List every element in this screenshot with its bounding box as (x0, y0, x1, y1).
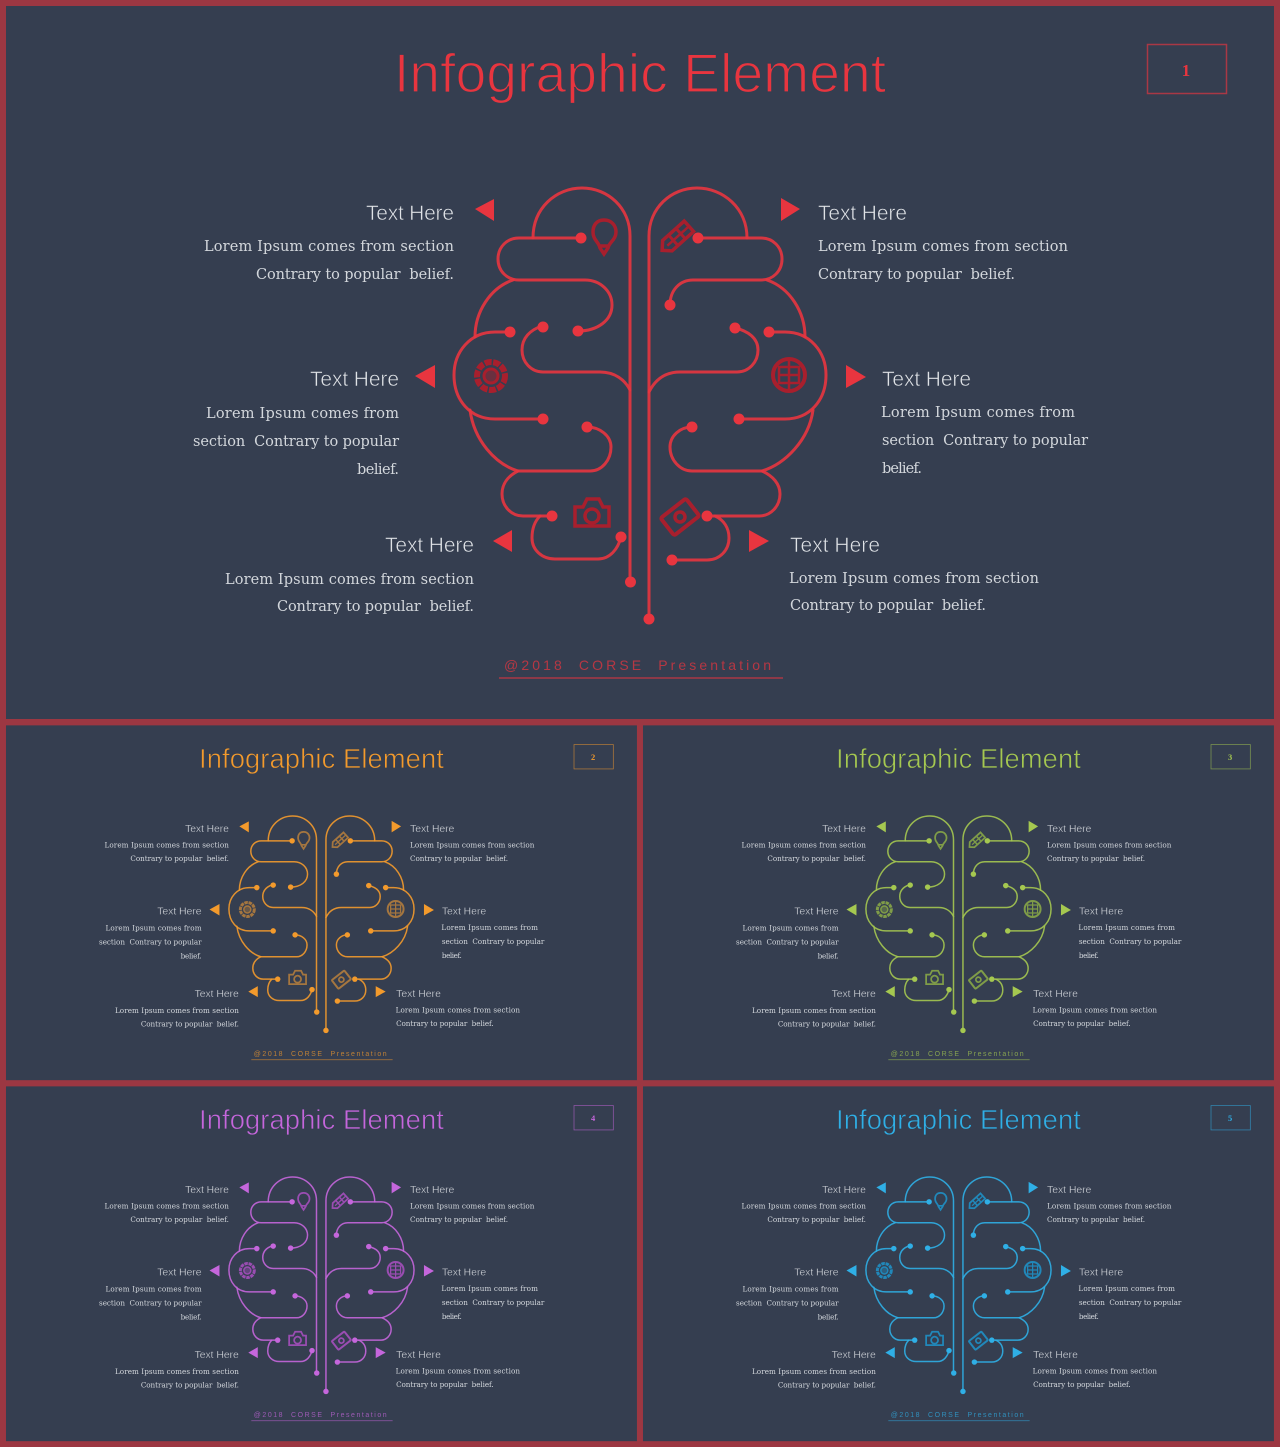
text block: left 2: section Contrary to popular (99, 1298, 202, 1307)
text block: left 1 (742, 1185, 866, 1224)
text block: left 3 (225, 534, 474, 615)
text block: right 3: Lorem Ipsum comes from section (396, 1367, 520, 1376)
text block: left 1: Contrary to popular belief. (130, 1215, 229, 1224)
text block: left 2: Text Here (794, 906, 839, 917)
text block: left 1: Contrary to popular belief. (767, 854, 866, 863)
page number box: 4 (591, 1113, 596, 1123)
title: Infographic Element (199, 1104, 444, 1135)
text block: left 3: Contrary to popular belief. (277, 599, 474, 615)
text block: right 1: Lorem Ipsum comes from section (410, 840, 535, 849)
text block: right 3: Lorem Ipsum comes from section (789, 571, 1039, 587)
text block: left 2 (99, 1267, 202, 1321)
text block: left 2: Text Here (310, 368, 399, 391)
text block: right 2: belief. (1079, 951, 1099, 960)
text block: left 2: belief. (818, 1312, 839, 1321)
text block: left 2: belief. (181, 951, 202, 960)
page number box: 5 (1228, 1113, 1232, 1123)
arrows (210, 1182, 434, 1358)
panel: 1 red large (6, 6, 1274, 719)
text block: left 1: Lorem Ipsum comes from section (742, 1201, 866, 1210)
panel: 2 orange (6, 725, 637, 1080)
text block: left 1: Lorem Ipsum comes from section (204, 239, 454, 255)
text block: left 3: Lorem Ipsum comes from section (752, 1006, 876, 1015)
text block: right 3: Text Here (396, 1350, 441, 1361)
text block: left 1: Text Here (822, 824, 866, 835)
text block: right 3: Lorem Ipsum comes from section (1033, 1367, 1157, 1376)
arrows (847, 1182, 1071, 1358)
text block: left 3: Text Here (195, 1350, 239, 1361)
text block: right 1: Contrary to popular belief. (1047, 854, 1145, 863)
page number box (1211, 745, 1250, 769)
icons (877, 832, 1041, 989)
text block: right 2: belief. (442, 951, 462, 960)
arrows (847, 821, 1071, 997)
text block: left 3: Text Here (832, 989, 876, 1000)
brain diagram (229, 816, 414, 1033)
text block: right 1: Lorem Ipsum comes from section (1047, 1201, 1172, 1210)
text block: right 1: Text Here (1047, 1185, 1092, 1196)
text block: right 2: belief. (1079, 1312, 1099, 1321)
text block: left 1: Text Here (185, 824, 229, 835)
text block: right 2: Lorem Ipsum comes from (881, 405, 1075, 421)
text block: left 3: Text Here (832, 1350, 876, 1361)
text block: left 3: Contrary to popular belief. (141, 1380, 239, 1389)
text block: left 2: section Contrary to popular (99, 937, 202, 946)
text block: left 2: belief. (357, 462, 399, 478)
title: Infographic Element (199, 743, 444, 774)
text block: left 3: Lorem Ipsum comes from section (115, 1006, 239, 1015)
text block: right 1 (1047, 1185, 1172, 1224)
text block: left 2: Lorem Ipsum comes from (106, 1284, 202, 1293)
text block: right 2: Text Here (1079, 1267, 1123, 1278)
text block: right 1 (1047, 824, 1172, 863)
text block: right 1: Contrary to popular belief. (410, 1215, 508, 1224)
text block: right 3: Contrary to popular belief. (790, 598, 986, 614)
text block: left 2: Lorem Ipsum comes from (743, 923, 839, 932)
text block: left 1: Contrary to popular belief. (256, 267, 454, 283)
text block: right 3: Contrary to popular belief. (396, 1019, 494, 1028)
footer: @2018 CORSE Presentation (254, 1412, 387, 1419)
text block: left 2 (736, 1267, 839, 1321)
brain diagram (454, 188, 826, 624)
page number box (1148, 44, 1226, 94)
text block: left 2: Text Here (794, 1267, 839, 1278)
text block: right 1: Contrary to popular belief. (1047, 1215, 1145, 1224)
text block: left 1: Text Here (185, 1185, 229, 1196)
text block: right 3 (1033, 989, 1157, 1028)
text block: right 2: Text Here (442, 1267, 486, 1278)
text block: right 2: section Contrary to popular (442, 1298, 545, 1307)
text block: left 2: Text Here (157, 1267, 202, 1278)
text block: right 1: Text Here (818, 202, 907, 225)
arrows (210, 821, 434, 997)
footer: @2018 CORSE Presentation (891, 1051, 1024, 1058)
text block: left 3 (115, 989, 239, 1028)
text block: right 3: Lorem Ipsum comes from section (1033, 1006, 1157, 1015)
text block: right 2: belief. (442, 1312, 462, 1321)
text block: left 3: Lorem Ipsum comes from section (115, 1367, 239, 1376)
arrows (415, 198, 866, 552)
text block: right 2: Text Here (882, 368, 971, 391)
brain diagram (229, 1177, 414, 1394)
text block: left 2: Text Here (157, 906, 202, 917)
text block: left 2: belief. (818, 951, 839, 960)
text block: right 3: Text Here (1033, 989, 1078, 1000)
text block: left 3 (752, 989, 876, 1028)
text block: right 2: section Contrary to popular (1079, 937, 1182, 946)
text block: right 3 (396, 1350, 520, 1389)
page number box: 3 (1228, 752, 1232, 762)
text block: right 2 (1078, 906, 1182, 960)
text block: left 2: section Contrary to popular (193, 434, 399, 450)
text block: left 1: Text Here (366, 202, 454, 225)
text block: left 3: Lorem Ipsum comes from section (225, 572, 474, 588)
text block: right 2: Lorem Ipsum comes from (441, 923, 538, 932)
text block: right 2: Text Here (442, 906, 486, 917)
text block: left 1: Contrary to popular belief. (767, 1215, 866, 1224)
text block: right 1 (410, 824, 535, 863)
text block: right 1: Lorem Ipsum comes from section (410, 1201, 535, 1210)
text block: right 1 (410, 1185, 535, 1224)
text block: left 1 (105, 824, 229, 863)
footer: @2018 CORSE Presentation (254, 1051, 387, 1058)
text block: left 2: section Contrary to popular (736, 937, 839, 946)
text block: right 3 (789, 534, 1039, 614)
text block: right 1: Text Here (1047, 824, 1092, 835)
text block: right 3 (1033, 1350, 1157, 1389)
text block: right 3: Contrary to popular belief. (1033, 1019, 1131, 1028)
page number box (1211, 1106, 1250, 1130)
text block: right 2 (881, 368, 1088, 477)
text block: right 2: belief. (882, 461, 922, 477)
text block: left 3: Lorem Ipsum comes from section (752, 1367, 876, 1376)
page number box (574, 1106, 613, 1130)
icons (240, 832, 404, 989)
text block: right 1: Lorem Ipsum comes from section (1047, 840, 1172, 849)
text block: right 3: Text Here (396, 989, 441, 1000)
text block: right 1: Contrary to popular belief. (818, 267, 1015, 283)
text block: left 2 (736, 906, 839, 960)
page number box: 1 (1182, 61, 1190, 80)
title: Infographic Element (836, 1104, 1081, 1135)
text block: left 1 (742, 824, 866, 863)
text block: right 2: section Contrary to popular (442, 937, 545, 946)
title: Infographic Element (394, 42, 886, 104)
text block: left 2: section Contrary to popular (736, 1298, 839, 1307)
text block: right 3: Contrary to popular belief. (1033, 1380, 1131, 1389)
text block: left 1 (204, 202, 454, 283)
text block: right 1: Lorem Ipsum comes from section (818, 239, 1068, 255)
text block: right 2: section Contrary to popular (882, 433, 1088, 449)
text block: right 2 (441, 1267, 545, 1321)
panel: 3 green (643, 725, 1274, 1080)
text block: left 2: Lorem Ipsum comes from (743, 1284, 839, 1293)
title: Infographic Element (836, 743, 1081, 774)
text block: right 3 (396, 989, 520, 1028)
text block: left 3: Contrary to popular belief. (141, 1019, 239, 1028)
text block: left 2: belief. (181, 1312, 202, 1321)
page number box (574, 745, 613, 769)
text block: left 2: Lorem Ipsum comes from (106, 923, 202, 932)
text block: left 1 (105, 1185, 229, 1224)
text block: left 3: Text Here (385, 534, 474, 557)
text block: right 2 (441, 906, 545, 960)
brain diagram (866, 1177, 1051, 1394)
text block: left 2 (99, 906, 202, 960)
footer: @2018 CORSE Presentation (891, 1412, 1024, 1419)
text block: left 2: Lorem Ipsum comes from (206, 406, 399, 422)
text block: left 3: Contrary to popular belief. (778, 1380, 876, 1389)
text block: right 2: Lorem Ipsum comes from (441, 1284, 538, 1293)
text block: left 3: Text Here (195, 989, 239, 1000)
icons (877, 1193, 1041, 1350)
text block: left 3: Contrary to popular belief. (778, 1019, 876, 1028)
brain diagram (866, 816, 1051, 1033)
text block: right 2: section Contrary to popular (1079, 1298, 1182, 1307)
text block: left 1: Lorem Ipsum comes from section (742, 840, 866, 849)
text block: right 2: Text Here (1079, 906, 1123, 917)
panel: 4 purple (6, 1086, 637, 1441)
text block: right 1: Text Here (410, 1185, 455, 1196)
text block: right 1: Contrary to popular belief. (410, 854, 508, 863)
page number box: 2 (591, 752, 595, 762)
text block: right 2 (1078, 1267, 1182, 1321)
text block: right 3: Text Here (790, 534, 880, 557)
text block: left 1: Lorem Ipsum comes from section (105, 840, 229, 849)
text block: right 3: Contrary to popular belief. (396, 1380, 494, 1389)
text block: right 3: Text Here (1033, 1350, 1078, 1361)
footer: @2018 CORSE Presentation (504, 657, 771, 673)
text block: left 3 (752, 1350, 876, 1389)
icons (240, 1193, 404, 1350)
text block: right 2: Lorem Ipsum comes from (1078, 923, 1175, 932)
text block: left 2 (193, 368, 399, 478)
text block: left 1: Lorem Ipsum comes from section (105, 1201, 229, 1210)
text block: right 3: Lorem Ipsum comes from section (396, 1006, 520, 1015)
text block: right 2: Lorem Ipsum comes from (1078, 1284, 1175, 1293)
text block: left 1: Contrary to popular belief. (130, 854, 229, 863)
text block: left 1: Text Here (822, 1185, 866, 1196)
panel: 5 blue (643, 1086, 1274, 1441)
text block: right 1 (818, 202, 1068, 283)
text block: left 3 (115, 1350, 239, 1389)
icons (477, 220, 805, 536)
text block: right 1: Text Here (410, 824, 455, 835)
